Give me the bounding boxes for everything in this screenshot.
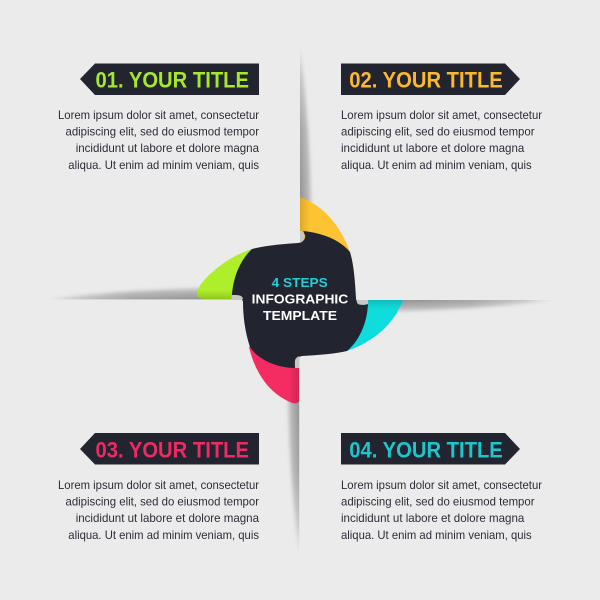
- fold shadow: left: [56, 286, 242, 300]
- petal: yellow: [300, 197, 350, 262]
- step 2 body text: [341, 108, 542, 172]
- step 1 body text: aliqua. Ut enim ad minim veniam, quis: [68, 158, 259, 172]
- step 1 body text: adipiscing elit, sed do eiusmod tempor: [66, 125, 259, 139]
- paper corner: right: [356, 300, 368, 305]
- paper corner: top: [300, 231, 304, 243]
- step 2 title: 02. YOUR TITLE: [349, 67, 503, 92]
- step 4 title: 04. YOUR TITLE: [349, 437, 503, 462]
- paper corner: bottom: [295, 356, 299, 368]
- label line: infographic: INFOGRAPHIC: [252, 292, 349, 306]
- step 4 body text: [341, 478, 542, 542]
- fold shadow: bottom: [286, 357, 300, 544]
- step 4 body text: adipiscing elit, sed do eiusmod tempor: [341, 495, 534, 509]
- step 3 body text: aliqua. Ut enim ad minim veniam, quis: [68, 528, 259, 542]
- petal: cyan: [335, 300, 403, 351]
- step 4 panel: [341, 433, 542, 542]
- fold shadow: top: [300, 54, 312, 202]
- step 2 body text: Lorem ipsum dolor sit amet, consectetur: [341, 108, 542, 122]
- step 1 banner: [80, 64, 259, 95]
- step 3 title: 03. YOUR TITLE: [96, 437, 249, 462]
- step 1 body text: [58, 108, 259, 172]
- step 2 body text: adipiscing elit, sed do eiusmod tempor: [341, 125, 534, 139]
- step 1 title: 01. YOUR TITLE: [96, 67, 249, 92]
- step 1 body text: Lorem ipsum dolor sit amet, consectetur: [58, 108, 259, 122]
- petal: green: [197, 249, 262, 299]
- petal: pink: [249, 340, 299, 403]
- label line: 4 steps: 4 STEPS: [272, 275, 328, 290]
- center label: [252, 275, 349, 323]
- step 1 panel: [58, 64, 259, 172]
- step 2 body text: aliqua. Ut enim ad minim veniam, quis: [341, 158, 532, 172]
- step 3 banner: [80, 433, 259, 464]
- step 1 body text: incididunt ut labore et dolore magna: [76, 141, 259, 155]
- step 2 panel: [341, 64, 542, 172]
- step 3 body text: [58, 478, 259, 542]
- step 4 body text: Lorem ipsum dolor sit amet, consectetur: [341, 478, 542, 492]
- step 4 banner: [341, 433, 520, 464]
- step 3 body text: adipiscing elit, sed do eiusmod tempor: [66, 495, 259, 509]
- step 2 banner: [341, 64, 520, 95]
- paper corner: left: [232, 295, 243, 299]
- center dark shape: [232, 231, 368, 368]
- fold shadow: right: [398, 300, 546, 312]
- step 4 body text: incididunt ut labore et dolore magna: [341, 511, 525, 525]
- label line: template: TEMPLATE: [263, 308, 337, 323]
- step 3 body text: incididunt ut labore et dolore magna: [76, 511, 259, 525]
- step 2 body text: incididunt ut labore et dolore magna: [341, 141, 525, 155]
- step 3 panel: [58, 433, 259, 542]
- step 3 body text: Lorem ipsum dolor sit amet, consectetur: [58, 478, 259, 492]
- step 4 body text: aliqua. Ut enim ad minim veniam, quis: [341, 528, 532, 542]
